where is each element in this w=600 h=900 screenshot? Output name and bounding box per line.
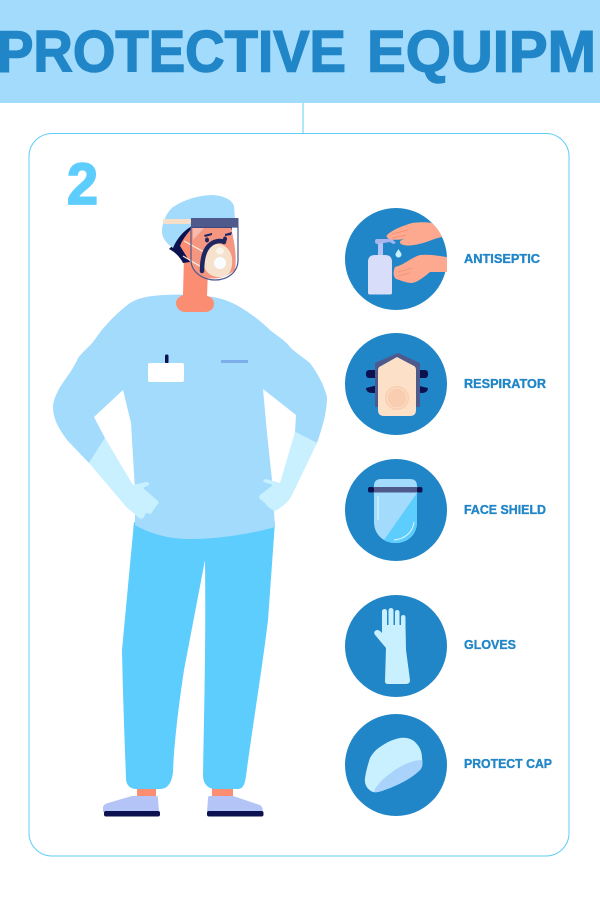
hair <box>169 226 232 263</box>
head <box>162 195 238 280</box>
pocket <box>221 360 248 363</box>
name badge <box>148 354 184 382</box>
item: protect cap <box>345 714 447 816</box>
item: gloves <box>345 595 447 697</box>
icon: face shield <box>368 479 422 543</box>
title: PROTECTIVE <box>0 20 346 84</box>
label: gloves: GLOVES <box>464 637 516 652</box>
face shield <box>191 218 238 280</box>
title banner <box>0 0 600 103</box>
icon: respirator mask <box>366 353 428 416</box>
eyes and brows <box>204 232 232 242</box>
item: respirator <box>345 333 447 435</box>
surgical cap <box>162 195 235 248</box>
step number: 2 <box>67 152 98 217</box>
icon: hands <box>387 222 447 283</box>
label: antiseptic: ANTISEPTIC <box>464 251 541 266</box>
title: EQUIPM <box>367 20 596 84</box>
trousers <box>122 522 275 789</box>
label: face shield: FACE SHIELD <box>464 502 546 517</box>
cap tie band <box>163 219 191 224</box>
face <box>180 228 236 279</box>
item: antiseptic <box>345 208 447 310</box>
gloves <box>89 432 317 519</box>
respirator mask <box>204 244 232 277</box>
label: protect cap: PROTECT CAP <box>464 756 552 771</box>
moustache strand <box>202 241 224 271</box>
neck <box>176 255 214 312</box>
icon: cap <box>365 738 422 792</box>
gown <box>53 295 327 539</box>
item: face shield <box>345 459 447 561</box>
icon: glove <box>374 608 410 684</box>
icon: drops <box>396 249 402 258</box>
label: respirator: RESPIRATOR <box>464 376 547 391</box>
shoes <box>103 796 264 816</box>
figure: medical worker in protective equipment <box>53 195 327 816</box>
icon: sanitizer bottle <box>368 239 396 294</box>
mask straps <box>183 241 204 268</box>
ankles <box>137 785 233 798</box>
mask valve <box>214 257 226 269</box>
panel: step card <box>29 134 569 856</box>
